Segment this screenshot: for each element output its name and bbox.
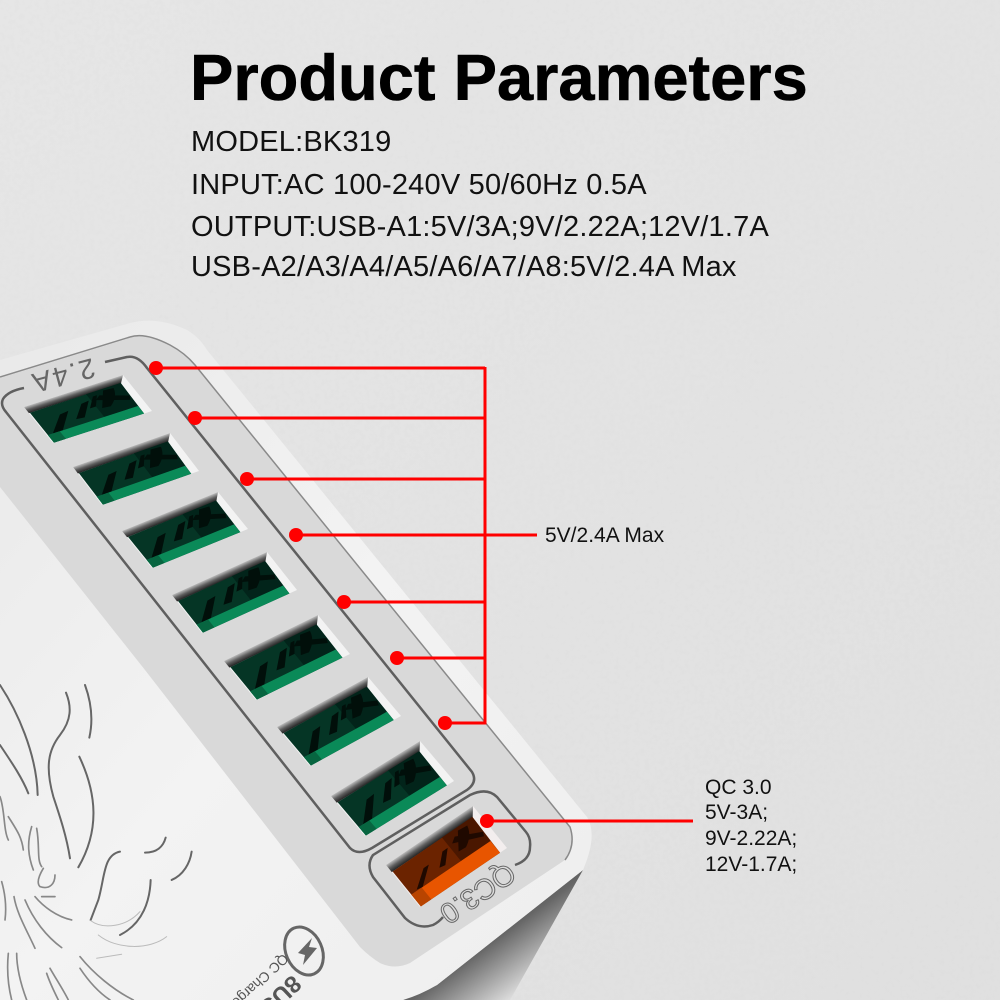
specification text: MODEL:BK319 <box>191 126 391 158</box>
front panel <box>0 336 572 967</box>
USB port 7 <box>331 741 454 836</box>
panel edge highlight <box>0 336 572 860</box>
QC outline <box>370 791 530 926</box>
cast shadow under charger <box>403 870 583 1000</box>
USB port 4 <box>172 552 297 633</box>
label: QC 3.0 specs: 5V-3A; <box>705 801 768 824</box>
USB port 1 <box>24 375 152 443</box>
label: QC3.0: QC3.0 <box>434 856 521 930</box>
label: QC 3.0 specs: QC 3.0 <box>705 776 772 799</box>
outline around 2.4A ports <box>2 357 474 852</box>
label: QC 3.0 specs: 9V-2.22A; <box>705 827 797 850</box>
label: QC 3.0 specs: 12V-1.7A; <box>705 853 797 876</box>
specification text: INPUT:AC 100-240V 50/60Hz 0.5A <box>191 169 647 201</box>
red callout: 2.4A ports <box>149 361 537 730</box>
charger device <box>0 321 592 1000</box>
label: QC 3.0 specs <box>705 776 797 876</box>
label: 2.4A: 2.4A <box>27 352 98 399</box>
title: Product Parameters <box>190 41 808 114</box>
USB port 6 <box>277 677 401 766</box>
icon: lightning charge logo <box>277 921 331 981</box>
callout dots <box>149 361 452 730</box>
USB port 3 <box>122 492 248 568</box>
label: 5V/2.4A Max: 5V/2.4A Max <box>545 524 665 547</box>
QC USB port <box>386 806 507 907</box>
specification text: USB-A2/A3/A4/A5/A6/A7/A8:5V/2.4A Max <box>191 251 737 283</box>
specification text: OUTPUT:USB-A1:5V/3A;9V/2.22A;12V/1.7A <box>191 211 769 243</box>
USB port 5 <box>224 615 350 700</box>
embossed flower pattern <box>0 685 192 1000</box>
charger white body <box>0 321 592 1000</box>
USB port 2 <box>73 433 199 505</box>
red callout: QC port <box>480 814 693 828</box>
specification text <box>191 126 769 283</box>
